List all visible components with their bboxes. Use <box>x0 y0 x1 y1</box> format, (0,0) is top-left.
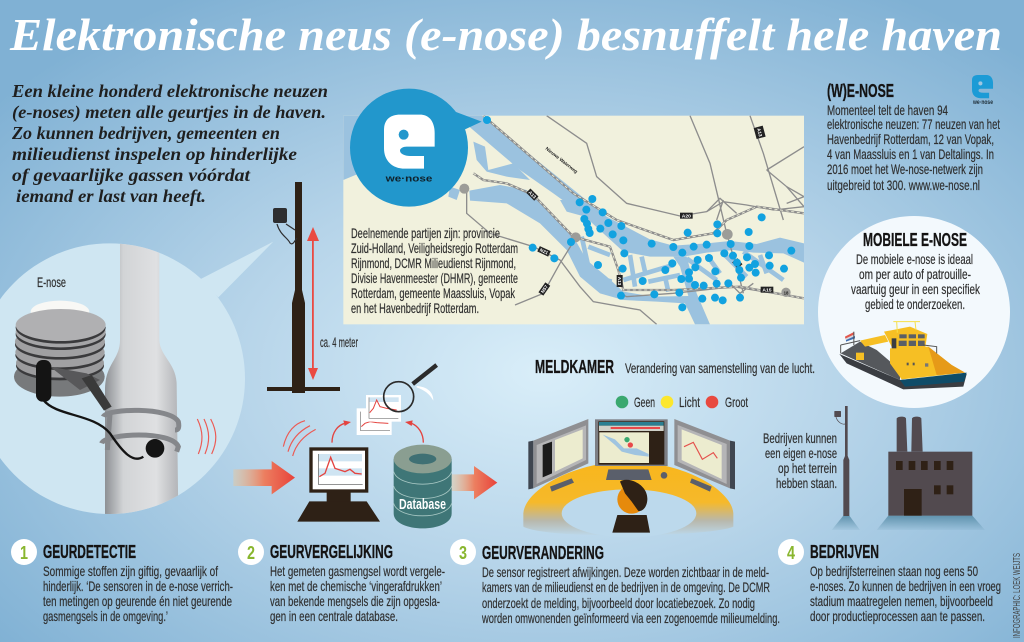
device on post <box>273 208 287 223</box>
map logo bubble <box>350 89 482 207</box>
desk <box>523 462 733 535</box>
map road labels: A13 <box>527 190 537 200</box>
map participants text: Rijnmond, DCMR Milieudienst Rijnmond, <box>351 256 516 271</box>
step 1 <box>11 539 233 624</box>
computer, database, comparison <box>283 365 497 528</box>
control room illustration <box>523 406 985 537</box>
map road labels <box>526 126 789 296</box>
step 1 badge <box>11 539 37 565</box>
step 2 text: van bekende mengsels die zijn opgesla- <box>270 594 440 609</box>
map road labels: A13 <box>617 277 622 286</box>
flow arrow 2 <box>452 466 497 499</box>
height arrow <box>307 227 319 380</box>
map participants text: en het Havenbedrijf Rotterdam. <box>351 301 479 316</box>
step 3 heading: GEURVERANDERING <box>482 543 604 563</box>
panel: mobile e-nose: MOBIELE E-NOSE <box>863 230 967 250</box>
map junctions <box>459 184 791 297</box>
step 2 badge: 2 <box>247 543 255 563</box>
map road labels: N57 <box>540 284 549 294</box>
factory note <box>763 431 837 491</box>
intro text: Een kleine honderd elektronische neuzen <box>11 81 328 101</box>
intro text: Zo kunnen bedrijven, gemeenten en <box>11 123 280 143</box>
label: E-nose: E-nose <box>37 275 66 290</box>
panel: (W)E-NOSE <box>827 81 1000 193</box>
factory pole <box>832 406 860 530</box>
step 1 text: gasmengsels in de omgeving.’ <box>43 609 168 624</box>
intro text: iemand er last van heeft. <box>16 186 206 206</box>
map participants text: Divisie Havenmeester (DHMR), gemeente <box>351 271 518 286</box>
right monitor <box>674 419 735 492</box>
signal waves <box>197 419 216 454</box>
map participants text <box>351 226 518 316</box>
e-nose location dots <box>483 116 795 311</box>
panel: mobile e-nose <box>818 216 1010 408</box>
sensor housing <box>14 301 112 411</box>
factory note: hebben staan. <box>776 476 837 491</box>
map roads <box>467 116 804 324</box>
left monitor <box>528 419 588 492</box>
clamp bands <box>102 410 179 452</box>
step 2 text: Het gemeten gasmengsel wordt vergele- <box>270 564 445 579</box>
step 3 <box>450 539 780 626</box>
factory note: Bedrijven kunnen <box>763 431 837 446</box>
step 1 text: hinderlijk. ‘De sensoren in de e-nose verrich- <box>43 579 233 594</box>
factory note: een eigen e-nose <box>765 446 837 461</box>
step 3 text: kamers van de milieudienst en de bedrijven in de omgeving. De DCMR <box>482 580 770 595</box>
title: Elektronische neus (e-nose) besnuffelt hele haven <box>9 10 1002 60</box>
legend: Licht <box>679 395 700 410</box>
credit: INFOGRAPHIC: LOEK WEIJTS <box>1012 553 1023 638</box>
panel: mobile e-nose: vaartuig geur in een specifiek <box>851 282 980 297</box>
step 4 badge <box>778 539 804 565</box>
step 2 heading: GEURVERGELIJKING <box>270 542 393 562</box>
map panel <box>343 89 804 324</box>
step 2 text: ken met de chemische ‘vingerafdrukken’ <box>270 579 442 594</box>
comparison sheets <box>357 395 401 435</box>
map road labels: A13 <box>756 128 763 138</box>
legend: Geen <box>634 395 655 410</box>
meldkamer heading: MELDKAMER <box>535 357 614 377</box>
map road labels: 18 <box>784 290 789 295</box>
height label: ca. 4 meter <box>320 335 358 350</box>
icon: patrol boat <box>839 322 967 389</box>
map water <box>343 116 804 324</box>
step 1 text: Sommige stoffen zijn giftig, gevaarlijk of <box>43 564 218 579</box>
icon: small we-nose logo <box>972 75 993 98</box>
step 3 text: De sensor registreert afwijkingen. Deze worden zichtbaar in de meld- <box>482 565 769 580</box>
step 3 text <box>481 565 780 626</box>
map participants text: Zuid-Holland, Veiligheidsregio Rotterdam <box>351 241 518 256</box>
computer <box>297 447 380 522</box>
intro text: of gevaarlijke gassen vóórdat <box>12 165 251 185</box>
magnifying glass <box>384 365 437 412</box>
small logo wordmark: we·nose <box>972 100 994 106</box>
operator <box>612 480 650 533</box>
keyboard <box>606 469 652 480</box>
map participants text: Deelnemende partijen zijn: provincie <box>351 226 500 241</box>
detail bubble: e-nose on pole <box>0 240 295 517</box>
map road labels: A15 <box>762 287 772 293</box>
map road labels: A20 <box>682 213 691 219</box>
map highways <box>473 116 804 298</box>
pole close-up <box>105 240 178 517</box>
factory note: op het terrein <box>778 461 837 476</box>
step 4 text <box>810 564 1001 624</box>
step 1 text <box>43 564 233 624</box>
intro text <box>11 81 328 206</box>
panel: (W)E-NOSE: (W)E-NOSE <box>827 81 894 101</box>
intro text: (e-noses) meten alle geurtjes in de haven. <box>12 102 326 122</box>
step 3 text: onderzoekt de melding, bijvoorbeeld door locatiebezoek. Zo nodig <box>482 596 755 611</box>
step 2 badge <box>238 539 264 565</box>
step 2 text <box>270 564 445 624</box>
centre monitor <box>595 419 668 466</box>
flow arrow 1 <box>233 461 295 494</box>
step 4 heading: BEDRIJVEN <box>810 542 879 562</box>
panel: mobile e-nose: gebied te onderzoeken. <box>865 297 965 312</box>
panel: mobile e-nose: De mobiele e-nose is ideaal <box>856 252 973 267</box>
meldkamer subtitle: Verandering van samenstelling van de lucht. <box>625 361 815 376</box>
panel: mobile e-nose: om per auto of patrouille- <box>859 267 971 282</box>
database label: Database <box>399 496 446 513</box>
intro text: milieudienst inspelen op hinderlijke <box>12 144 297 164</box>
map logo bubble: we·nose <box>384 174 432 184</box>
map participants text: Rotterdam, gemeente Maassluis, Vopak <box>351 286 515 301</box>
map road labels: N21 <box>539 247 549 256</box>
lamp post with height arrow <box>267 182 358 393</box>
step 1 text: ten metingen op geurende én niet geurende <box>43 594 232 609</box>
database <box>394 445 452 528</box>
step 3 badge <box>450 539 476 565</box>
legend <box>616 395 748 410</box>
signal waves <box>283 421 316 456</box>
step 3 text: worden omwonenden geïnformeerd via een zogenoemde milieumelding. <box>481 611 780 626</box>
legend: Groot <box>725 395 748 410</box>
step 3 badge: 3 <box>459 543 467 563</box>
step 2 <box>238 539 445 624</box>
comparison arrows <box>332 420 423 443</box>
step 2 text: gen in een centrale database. <box>270 609 398 624</box>
step 4 <box>778 539 1001 624</box>
mouse <box>661 472 667 479</box>
step 4 badge: 4 <box>787 543 795 563</box>
step 1 heading: GEURDETECTIE <box>43 542 136 562</box>
map road labels: Nieuwe Waterweg <box>544 146 579 174</box>
panel: (W)E-NOSE: Momenteel telt de haven 94 <box>827 103 948 118</box>
step 1 badge: 1 <box>20 543 28 563</box>
factory <box>877 417 985 530</box>
sensor cable <box>43 400 143 459</box>
